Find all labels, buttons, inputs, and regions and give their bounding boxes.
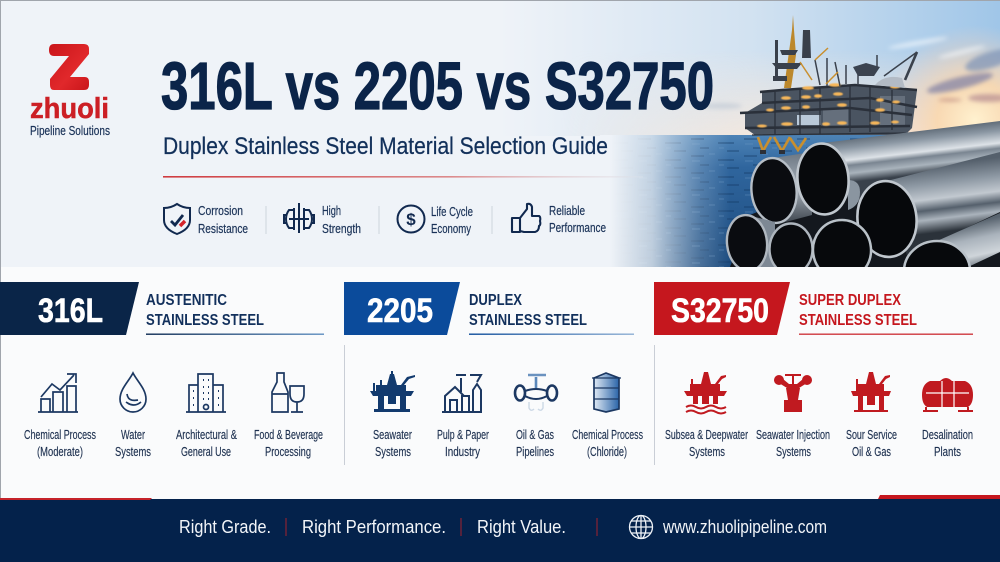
deck lines <box>740 85 917 135</box>
icon: pipeline valve <box>515 375 557 410</box>
top modules <box>853 63 880 76</box>
S32750 application labels: Systems <box>776 445 811 459</box>
S32750 application labels: Subsea & Deepwater <box>665 428 748 442</box>
footer slogan <box>179 516 566 537</box>
2205 application labels: Chemical Process <box>572 428 643 442</box>
logo wordmark: zhuoli <box>30 93 109 125</box>
icon: subsea platform <box>684 372 727 414</box>
316L badge: 316L <box>38 292 103 330</box>
S32750 heading <box>799 292 917 329</box>
feature: corrosion resistance <box>198 203 248 236</box>
footer slogan: Right Performance. <box>302 516 446 537</box>
feature row <box>164 203 606 236</box>
panel: S32750 <box>654 282 973 459</box>
icon: pulp and paper mill <box>442 375 482 412</box>
sunset glow <box>902 32 1000 132</box>
2205 application labels: Pipelines <box>516 445 554 459</box>
feature: high strength: Strength <box>322 221 361 236</box>
pipe C <box>854 152 1000 260</box>
S32750 badge: S32750 <box>671 292 769 330</box>
2205 heading: STAINLESS STEEL <box>469 312 587 329</box>
S32750 application labels: Sour Service <box>846 428 897 442</box>
2205 application labels: Oil & Gas <box>516 428 554 442</box>
316L application labels: Water <box>121 428 145 442</box>
2205 application labels: Systems <box>375 445 411 459</box>
2205 application labels: Industry <box>445 445 481 459</box>
footer slogan: Right Value. <box>477 516 566 537</box>
icon: shield <box>164 204 190 234</box>
icon: water drop <box>120 373 146 412</box>
panel: 316L <box>0 282 324 459</box>
icon: dollar coin <box>398 206 424 232</box>
2205 heading: DUPLEX <box>469 292 522 309</box>
footer website: www.zhuolipipeline.com <box>662 516 827 537</box>
316L heading <box>146 292 264 329</box>
steel pipes <box>726 121 1000 267</box>
offshore platform <box>740 15 917 154</box>
S32750 heading: STAINLESS STEEL <box>799 312 917 329</box>
pipe A <box>795 121 1000 217</box>
feature: life cycle economy: Economy <box>431 221 471 236</box>
pipe E <box>770 224 812 274</box>
clouds <box>702 35 1000 109</box>
sky <box>570 1 1000 136</box>
footer <box>0 495 1000 562</box>
2205 heading <box>469 292 587 329</box>
feature: corrosion resistance: Corrosion <box>198 203 243 218</box>
316L badge <box>0 282 139 335</box>
pipe G <box>903 213 1000 267</box>
316L heading: STAINLESS STEEL <box>146 312 264 329</box>
icon: desalination tanks <box>922 378 973 411</box>
logo <box>30 44 110 138</box>
316L application labels: Architectural & <box>176 428 237 442</box>
316L application labels: Systems <box>115 445 151 459</box>
2205 application labels: (Chloride) <box>587 445 627 459</box>
subtitle: Duplex Stainless Steel Material Selection Guide <box>163 133 608 160</box>
316L application labels: Processing <box>265 445 311 459</box>
316L application labels: Food & Beverage <box>254 428 323 442</box>
2205 badge: 2205 <box>367 292 433 330</box>
derrick <box>784 15 796 88</box>
2205 application labels: Pulp & Paper <box>437 428 489 442</box>
icon: offshore rig <box>370 371 415 412</box>
stack shadow <box>730 196 1000 267</box>
light window <box>797 115 821 125</box>
S32750 heading: SUPER DUPLEX <box>799 292 901 309</box>
subtitle rule <box>163 176 643 178</box>
feature: high strength: High <box>322 203 341 218</box>
feature: reliable performance <box>549 203 606 235</box>
2205 application labels <box>373 428 643 459</box>
horizon haze <box>627 62 940 135</box>
S32750 application labels: Desalination <box>922 428 973 442</box>
glowing deck lights <box>757 83 900 128</box>
icon: dumbbell <box>284 203 314 233</box>
cranes and masts <box>800 48 917 86</box>
316L application labels: (Moderate) <box>37 445 83 459</box>
footer slogan: Right Grade. <box>179 516 271 537</box>
feature: corrosion resistance: Resistance <box>198 221 248 236</box>
logo tagline: Pipeline Solutions <box>30 123 110 138</box>
feature: life cycle economy: Life Cycle <box>431 204 473 219</box>
hero banner <box>1 1 1000 267</box>
sea waves <box>650 138 860 267</box>
316L application labels: General Use <box>181 445 231 459</box>
S32750 application labels: Seawater Injection <box>756 428 830 442</box>
platform legs <box>758 137 806 151</box>
icon: thumbs up <box>512 204 540 232</box>
S32750 badge <box>654 282 790 335</box>
feature: reliable performance: Reliable <box>549 203 585 218</box>
S32750 application labels <box>665 428 973 459</box>
feature: reliable performance: Performance <box>549 220 606 235</box>
title: 316L vs 2205 vs S32750 <box>161 49 714 124</box>
316L application labels <box>24 428 323 459</box>
icon: bottle and glass <box>272 373 304 412</box>
panel: 2205 <box>344 282 643 459</box>
pipe D <box>726 214 775 267</box>
316L heading: AUSTENITIC <box>146 292 227 309</box>
pipe B <box>748 152 812 225</box>
S32750 application labels: Oil & Gas <box>852 445 891 459</box>
S32750 application labels: Plants <box>934 445 961 459</box>
icon: injection valve <box>774 374 812 412</box>
feature: life cycle economy <box>431 204 473 236</box>
icon: globe <box>630 516 652 538</box>
icon: dollar coin: $ <box>406 210 416 229</box>
2205 application labels: Seawater <box>373 428 412 442</box>
icon: chemical process chart <box>38 374 78 412</box>
icon: storage tank <box>592 373 621 412</box>
sea fade into background <box>600 135 730 267</box>
platform hull <box>745 85 917 135</box>
316L application labels: Chemical Process <box>24 428 96 442</box>
icon: sour service rig <box>851 372 891 412</box>
logo mark <box>49 44 89 90</box>
icon: buildings <box>186 374 226 412</box>
feature: high strength <box>322 203 361 236</box>
sea <box>618 135 887 267</box>
pipe F <box>812 218 872 267</box>
2205 badge <box>344 282 460 335</box>
S32750 application labels: Systems <box>689 445 725 459</box>
